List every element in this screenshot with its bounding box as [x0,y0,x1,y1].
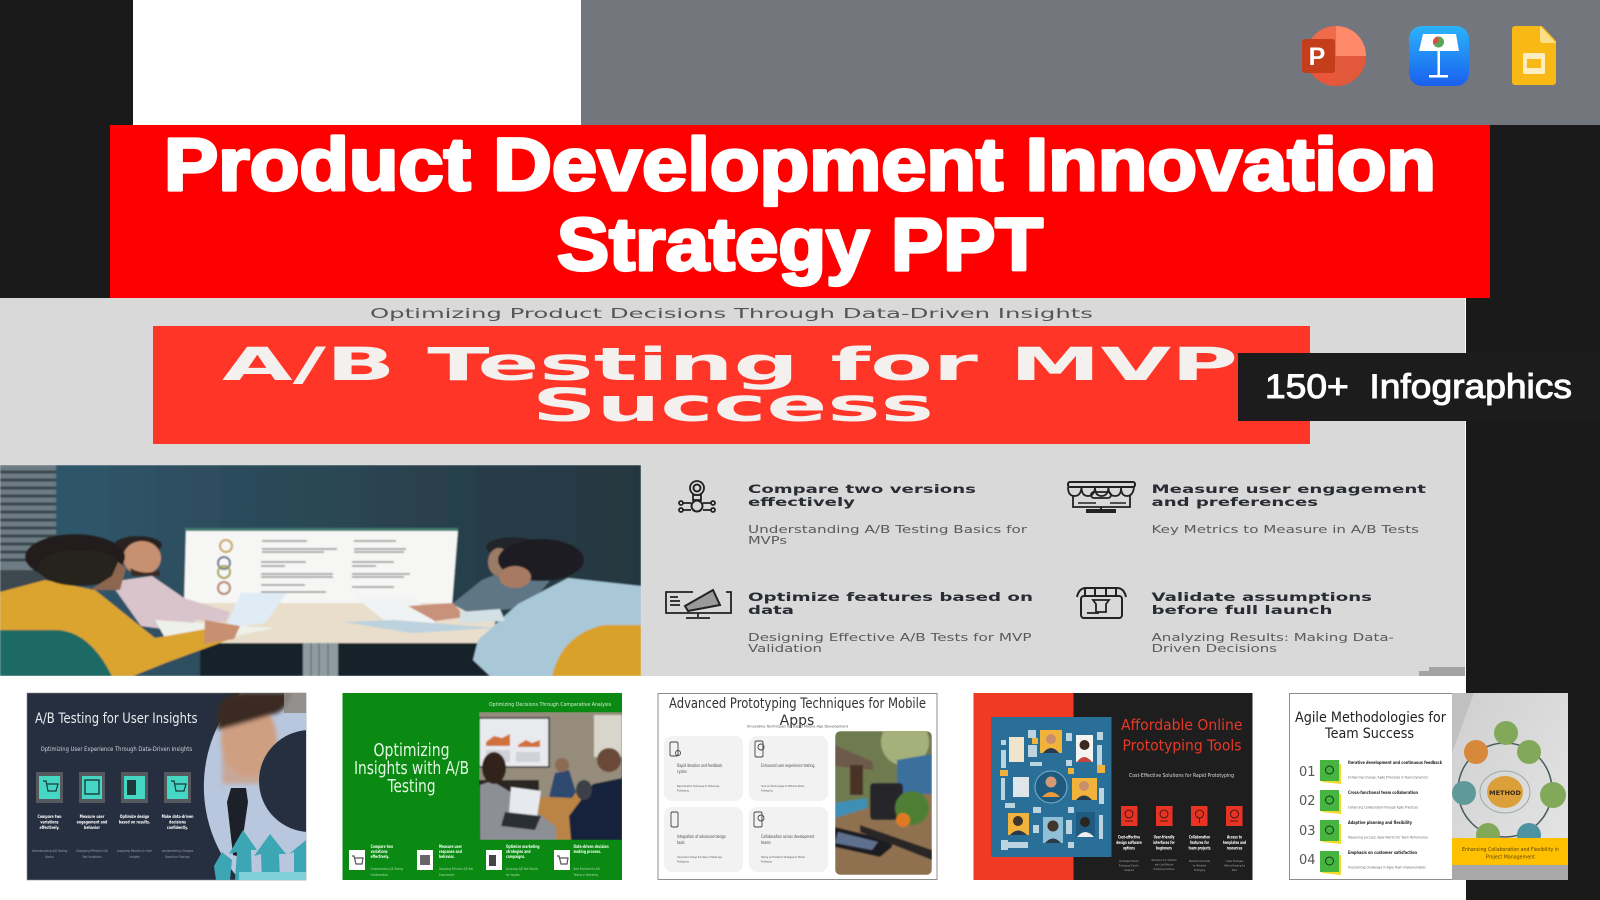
feature: optimize features: Designing Effective A/B Tests for MVP [748,632,1032,644]
thumbnail cards: Rapid Iteration Techniques for Mobile App [677,785,720,788]
thumbnail title: Agile Methodologies for [1295,710,1446,726]
thumbnail cards: Tools and Technologies for Effective Mobile [761,785,805,788]
thumbnail labels: resources [1227,846,1242,851]
thumbnail labels: response and [439,850,462,854]
icon: PowerPoint: P [1309,43,1325,71]
thumbnail labels [32,813,194,859]
thumbnail labels: variations [40,819,59,825]
thumbnail icons [1121,806,1242,826]
thumbnail labels: Make data-driven [162,813,194,819]
panel: main slide [0,298,1465,676]
thumbnail list [1299,760,1443,875]
thumbnail title: Testing [387,776,436,797]
feature: compare two versions: Compare two versions [748,482,976,496]
screen [184,528,458,605]
icon: Google Slides [1512,26,1556,85]
thumbnail: Agile Methodologies for Team Success [1290,693,1568,880]
thumbnail labels: Designing Effective A/B [76,849,108,853]
thumbnail labels: Without Breaking the [1224,863,1245,868]
thumbnail list: Measuring Success: Agile Metrics for Team Performance [1348,836,1428,840]
thumbnail cards: teams [761,841,771,845]
thumbnail labels: for Insights [506,873,520,877]
thumbnail labels: strategies and [506,850,531,854]
thumbnail callout [1452,838,1568,865]
feature: optimize features [666,590,1033,655]
feature: validate assumptions: before full launch [1152,603,1332,617]
thumbnail: Affordable Online Prototyping Tools: Prototyping Tools [1122,737,1242,755]
thumbnail list: Iterative development and continuous feedback [1348,760,1443,766]
thumbnail photo [479,712,622,840]
thumbnail labels: confidently. [167,824,189,830]
thumbnail list: 04 [1299,853,1316,868]
thumbnail diagram photo: METHOD [1489,789,1521,797]
thumbnail cards: Prototyping [677,860,689,864]
table [194,602,496,676]
thumbnail title: Advanced Prototyping Techniques for Mobile [669,696,926,712]
thumbnail title: Insights with A/B [354,758,469,779]
thumbnail labels: behavior [84,824,100,830]
thumbnail: Affordable Online Prototyping Tools [974,693,1252,880]
feature: measure user engagement [1068,482,1427,536]
badge: 150+ infographics [1238,353,1600,421]
thumbnail labels: Designing Effective A/B Test [439,867,474,871]
thumbnail labels: Bank [1232,867,1237,872]
feature: optimize features: Validation [748,643,822,655]
thumbnail list: 03 [1299,824,1316,839]
thumbnail labels: Fundamentals [371,873,388,877]
thumbnail callout: Enhancing Collaboration and Flexibility in [1462,847,1559,853]
thumbnail labels: Prototyping Solutions [1153,866,1175,871]
icon: shop phone [1077,588,1126,618]
thumbnail labels: based on results. [119,819,151,825]
photo: team meeting [0,465,641,676]
icon: megaphone monitor [666,590,731,618]
thumbnail list: Overcoming Challenges in Agile Team Implementation [1348,866,1426,870]
slide subtitle: Optimizing Product Decisions Through Data-Driven Insights [370,306,1093,322]
thumbnail list: Enhancing Collaboration through Agile Practices [1348,806,1418,810]
thumbnail labels: Testing in Marketing [573,873,598,877]
person: back right [452,537,557,612]
main title banner [110,123,1490,298]
slide corner tab [1419,667,1465,676]
thumbnail labels: Analyzing A/B Test Results [506,867,538,871]
thumbnail cards [664,736,828,872]
thumbnail cards: tools [677,841,685,845]
thumbnail cards: Prototyping [677,789,689,793]
thumbnail labels: team projects [1188,846,1211,851]
slide title box [153,326,1310,444]
thumbnail labels: Data-driven decision [574,845,609,849]
feature: measure user engagement: and preferences [1152,495,1318,509]
title: Strategy PPT [557,203,1043,286]
thumbnail: Optimizing Insights with A/B Testing [342,693,622,880]
thumbnail cards: Collaboration across development [761,835,815,839]
thumbnail cards: User-Centric Design Principles in Mobile App [677,856,722,859]
feature: validate assumptions [1077,588,1394,655]
thumbnail labels: variations [371,850,388,854]
feature: compare two versions: effectively [748,495,856,509]
thumbnail labels: Streamline Your Workflow [1151,857,1177,862]
thumbnail labels: for Affordable [1193,863,1207,868]
thumbnail diagram photo [1452,693,1568,880]
person: front left yellow [0,534,240,676]
thumbnail list: Cross-functional team collaboration [1348,790,1418,796]
thumbnail list: Adaptive planning and flexibility [1348,820,1412,826]
thumbnail illustration [991,717,1112,857]
title: Product Development Innovation [164,123,1436,206]
thumbnail list: 01 [1299,765,1316,780]
thumbnail labels: Prototyping [1194,867,1205,872]
thumbnail labels: making process. [574,850,602,854]
icon: storefront monitor [1068,482,1135,512]
thumbnail cards: Integration of advanced design [677,835,726,839]
thumbnail subtitle: Optimizing Decisions Through Comparative Analysis [489,702,611,708]
thumbnail labels: design software [1116,840,1142,845]
thumbnail labels: Cost-effective [1118,835,1140,840]
thumbnail callout: Project Management [1486,854,1535,860]
person: front right blue [408,539,641,676]
thumbnail icons [349,850,570,870]
feature: measure user engagement: Key Metrics to Measure in A/B Tests [1152,524,1419,536]
badge: 150+ infographics: 150+ Infographics [1265,368,1572,406]
thumbnail labels: Understanding A/B Testing [371,867,403,871]
icon: Keynote [1409,26,1469,86]
thumbnail labels: interfaces for [1153,840,1175,845]
thumbnail title: Affordable Online [1121,716,1242,734]
thumbnail title [354,740,469,797]
thumbnail labels: Best Practices for A/B [574,867,600,871]
thumbnail labels: User-friendly [1154,835,1175,840]
thumbnail labels: Collaboration [1189,835,1211,840]
thumbnail: A/B Testing for User Insights [26,692,306,880]
thumbnail: Advanced Prototyping Techniques [658,694,937,880]
thumbnail labels: Understanding A/B Testing [32,849,67,853]
thumbnail title: A/B Testing for User Insights [35,711,198,727]
thumbnail labels [371,845,609,877]
thumbnail: Affordable Online Prototyping Tools: Cost-Effective Solutions for Rapid Prototyping [1129,773,1234,779]
thumbnail labels: features for [1190,840,1209,845]
thumbnail labels: effectively. [371,855,390,859]
thumbnail cards: Rapid iteration and feedback [677,764,723,768]
thumbnail labels: Test Variations [81,855,102,859]
thumbnail labels: Essential Online Tools [1189,858,1211,863]
feature: validate assumptions: Driven Decisions [1152,643,1277,655]
thumbnail labels: Compare two [371,845,393,849]
thumbnail labels [1116,835,1246,872]
thumbnail labels: templates and [1223,840,1246,845]
thumbnail cards: Prototypes [761,860,772,864]
thumbnail labels: engagement and [77,819,108,825]
thumbnail labels: Create Prototypes [1226,858,1244,863]
thumbnail photo [835,718,932,875]
laptops [155,593,496,638]
feature: compare two versions: MVPs [748,535,787,547]
thumbnail title: Optimizing [374,740,450,761]
thumbnail labels: Experiments [439,873,455,877]
title [164,123,1436,286]
thumbnail icons [36,772,191,803]
thumbnail labels: Implementing Changes [162,849,193,853]
feature: validate assumptions: Analyzing Results: Making Data- [1152,632,1394,644]
thumbnail labels: with Cost-Effective [1155,862,1174,867]
thumbnail labels: effectively. [40,824,60,830]
icon: PowerPoint [1302,26,1366,86]
thumbnail labels: Optimize marketing [506,845,540,849]
thumbnail labels: Based on Findings [165,855,190,859]
thumbnail labels: decisions [169,819,187,825]
feature: optimize features: data [748,603,794,617]
slide title box: A/B Testing for MVP [222,338,1238,391]
thumbnail list: Emphasis on customer satisfaction [1348,850,1417,856]
thumbnail: Advanced Prototyping Techniques: Apps [780,713,814,729]
slide title box: Success [532,379,934,432]
thumbnail cards: Enhanced user experience testing [761,764,815,768]
icon: bulb network [679,481,715,512]
thumbnail cards: Testing and Feedback Strategies for Mobile [761,856,805,859]
thumbnail: Agile Methodologies for Team Success: Team Success [1324,726,1414,742]
thumbnail cards: Prototyping [761,789,773,793]
thumbnail labels: Measure user [80,813,104,819]
feature: measure user engagement: Measure user engagement [1152,482,1427,496]
thumbnail labels: Basics [45,855,54,859]
thumbnail labels: campaigns. [506,855,526,859]
feature: compare two versions: Understanding A/B Testing Basics for [748,524,1028,536]
person: back left [110,536,230,632]
feature: validate assumptions: Validate assumptions [1152,590,1372,604]
feature: optimize features: Optimize features based on [748,590,1033,604]
thumbnail: Advanced Prototyping Techniques: Innovative Techniques for Rapid Mobile App Development [747,724,849,728]
thumbnail labels: Optimize design [120,813,149,819]
thumbnail labels: Analyzing Results for User [117,849,153,853]
thumbnail labels: Insights [129,855,140,859]
thumbnail labels: behavior. [439,855,455,859]
thumbnail labels: Compare two [37,813,62,819]
thumbnail labels: options [1123,846,1135,851]
thumbnail labels: Top Budget-Friendly [1119,858,1139,863]
thumbnail labels: beginners [1156,846,1172,851]
thumbnail cards: cycles [677,770,687,774]
thumbnail list: Enhancing Change: Agile Principles in Team Dynamics [1348,776,1428,780]
thumbnail list: 02 [1299,794,1316,809]
thumbnail labels: Prototyping Tools for [1119,863,1140,868]
thumbnail: A/B Testing for User Insights: Optimizing User Experience Through Data-Driven Insights [41,746,192,753]
feature: compare two versions [679,481,1028,547]
thumbnail labels: Designers [1124,867,1134,872]
thumbnail labels: Measure user [439,845,462,849]
thumbnail portrait [204,693,306,880]
thumbnail labels: Access to [1227,835,1242,840]
